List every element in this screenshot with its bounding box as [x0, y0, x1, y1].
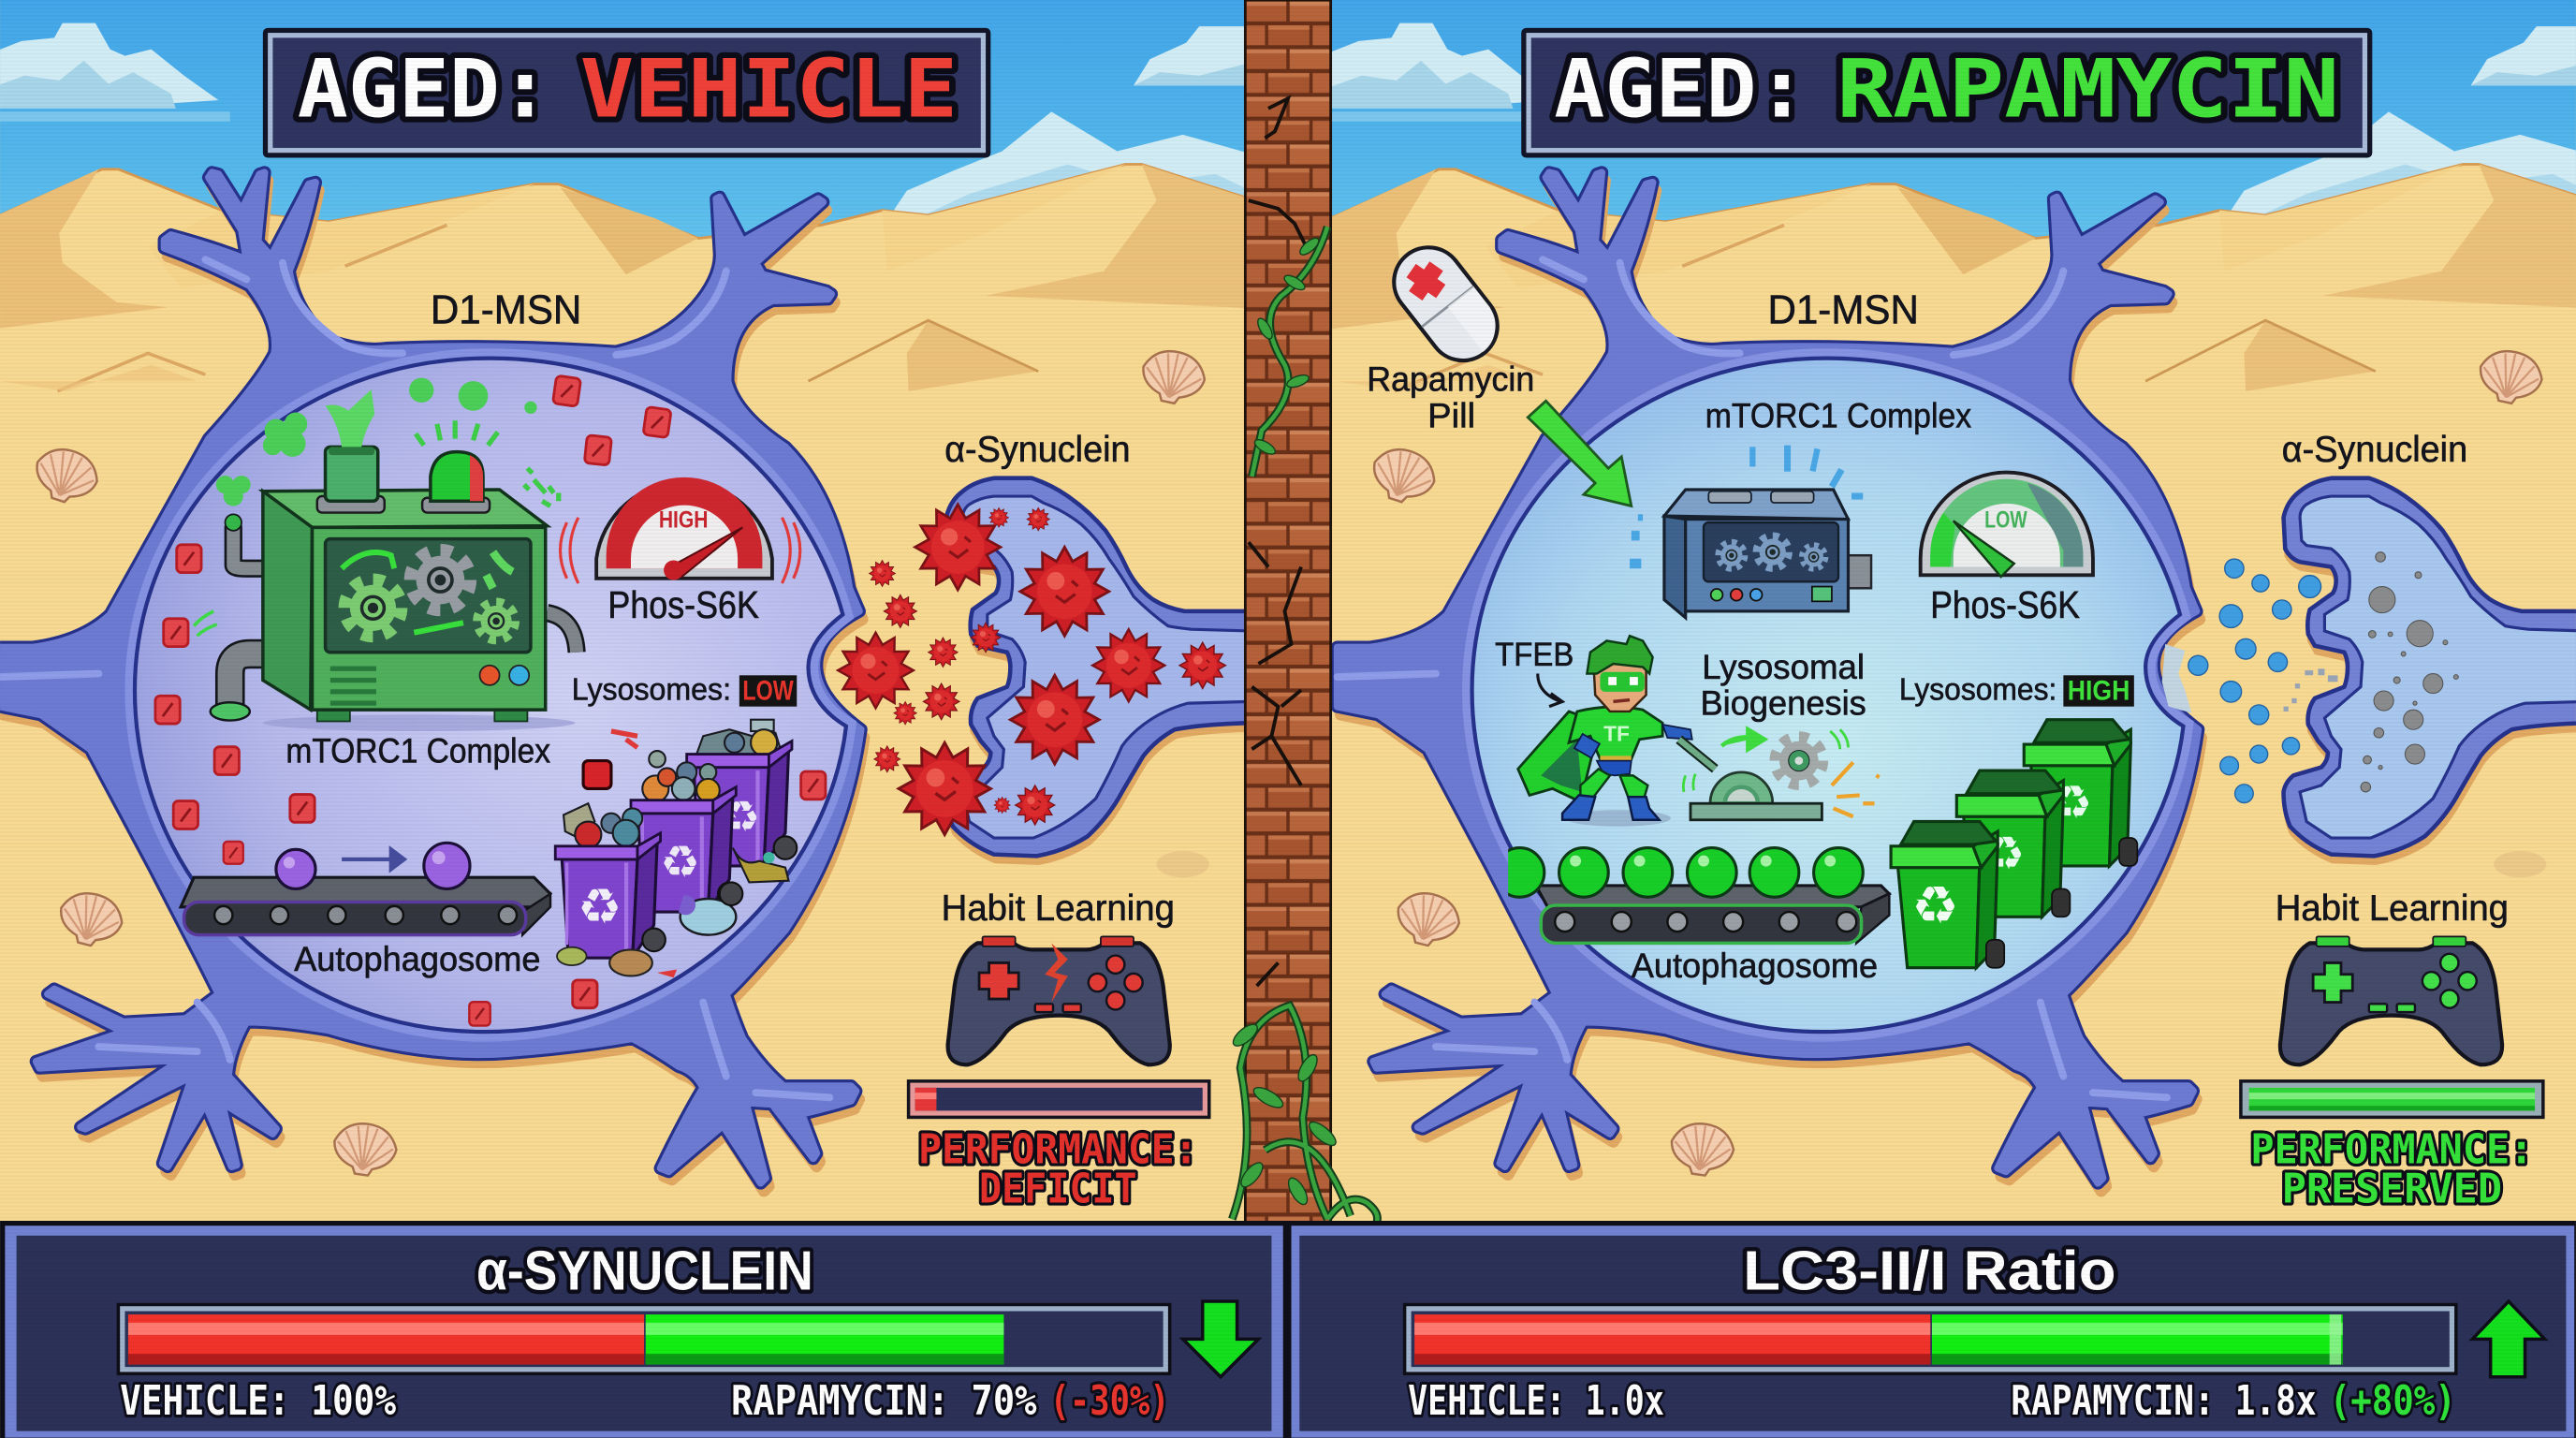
title banner: aged rapamycin: AGED: [1554, 43, 1808, 137]
bar labels: VEHICLE: 1.0x [1408, 1377, 1664, 1425]
desert scene with neuron [1321, 0, 2576, 1249]
icon: damaged gamepad [948, 936, 1170, 1064]
icon: overheating mTORC1 machine [211, 447, 577, 731]
icon: dissolving synapse speckle [2162, 644, 2337, 713]
label: rapamycin pill [1367, 360, 1534, 434]
arrow: increase [2472, 1301, 2545, 1377]
arrow: decrease [1183, 1301, 1258, 1377]
stacked bar [1403, 1303, 2458, 1375]
bar labels: (+80%) [2330, 1377, 2456, 1425]
icon: clean green recycling bins [1891, 720, 2137, 968]
title banner: aged vehicle [263, 28, 990, 157]
icon: TFEB superhero: TF [1603, 722, 1630, 746]
bar labels [120, 1377, 1170, 1425]
icon: conveyor with autophagosomes [181, 843, 550, 935]
status: performance deficit: DEFICIT [979, 1166, 1137, 1213]
status: performance deficit: PERFORMANCE: [918, 1126, 1197, 1174]
title banner: aged rapamycin: RAPAMYCIN [1837, 43, 2339, 137]
icon: overflowing purple recycling bins: ♻ [578, 879, 622, 934]
icon: biogenesis gears [1683, 729, 1880, 820]
label: lysosomal biogenesis [1701, 648, 1866, 722]
bar labels: RAPAMYCIN: 70% [731, 1377, 1037, 1425]
icon: calm mTORC1 machine [1664, 490, 1871, 618]
label: lysosomes low: Lysosomes: [572, 673, 731, 708]
label: phos-S6K: Phos-S6K [1930, 583, 2080, 626]
bar labels: RAPAMYCIN: 1.8x [2011, 1377, 2317, 1425]
presynaptic terminal [2300, 496, 2576, 838]
title banner: aged rapamycin [1521, 28, 2372, 157]
label: habit learning: Habit Learning [2276, 888, 2509, 929]
bar labels [1408, 1377, 2456, 1425]
icon: clean green recycling bins: ♻ [1911, 875, 1959, 934]
icon: clean green recycling bins: ♻ [2051, 778, 2092, 829]
stat panel: LC3 ratio [1292, 1221, 2576, 1438]
icon: conveyor with autophagosomes [1495, 848, 1889, 943]
desert scene with neuron [0, 0, 1265, 1249]
label: mTORC1 complex: mTORC1 Complex [285, 731, 551, 770]
status: performance preserved [2250, 1126, 2533, 1213]
label: rapamycin pill: Rapamycin [1367, 360, 1534, 399]
progress bar: performance deficit [907, 1079, 1211, 1119]
label: lysosomes high: HIGH [2068, 676, 2130, 707]
label: lysosomal biogenesis: Biogenesis [1701, 683, 1866, 722]
icon: overflowing purple recycling bins: ♻ [660, 838, 700, 888]
label: phos-S6K: Phos-S6K [607, 583, 759, 626]
vine: upper wall [1251, 227, 1327, 477]
label: TFEB with pointer: TFEB [1495, 637, 1573, 673]
label: lysosomes high: Lysosomes: [1899, 673, 2056, 708]
soma cytoplasm [1472, 359, 2183, 1032]
soma cytoplasm [135, 359, 846, 1032]
stat title: α-SYNUCLEIN [476, 1240, 813, 1302]
icon: healthy gamepad [2280, 936, 2502, 1064]
presynaptic terminal [963, 496, 1249, 838]
icon: overflowing purple recycling bins [555, 720, 797, 977]
brick wall divider [1245, 0, 1331, 1223]
arrow: pill acting on mTORC1 [1528, 401, 1632, 506]
label: autophagosome: Autophagosome [294, 940, 540, 978]
label: mTORC1 complex: mTORC1 Complex [1705, 396, 1972, 434]
label: TFEB with pointer [1495, 637, 1573, 707]
label: lysosomal biogenesis: Lysosomal [1702, 648, 1865, 686]
progress bar: performance preserved [2239, 1079, 2545, 1119]
stat title: LC3-II/I Ratio [1743, 1240, 2116, 1302]
icon: red cross on pill [1401, 256, 1451, 306]
label: D1-MSN: D1-MSN [1767, 287, 1919, 333]
icon: green exhaust smoke [194, 378, 559, 636]
label: alpha-synuclein: α-Synuclein [944, 430, 1131, 470]
label: autophagosome: Autophagosome [1632, 946, 1878, 985]
icon: phos-S6K high gauge: HIGH [659, 507, 708, 533]
label: alpha-synuclein: α-Synuclein [2282, 430, 2467, 470]
title banner: aged vehicle: AGED: [298, 43, 550, 137]
panel: aged vehicle [0, 0, 1265, 1249]
bar labels: VEHICLE: 100% [120, 1377, 397, 1425]
vine: lower wall [1230, 1005, 1377, 1223]
bar labels: (-30%) [1050, 1377, 1170, 1425]
status: performance preserved: PERFORMANCE: [2250, 1126, 2533, 1174]
icon: released alpha-synuclein droplets [2188, 559, 2321, 803]
icon: blue activity sparks [1630, 446, 1863, 568]
label: D1-MSN: D1-MSN [431, 287, 581, 333]
icon: phos-S6K low gauge: LOW [1984, 507, 2027, 533]
icon: aggregating alpha-synuclein particles [838, 505, 1225, 835]
panel: aged rapamycin [1321, 0, 2576, 1249]
label: lysosomes low: LOW [742, 676, 794, 707]
icon: TFEB superhero [1518, 636, 1715, 827]
icon: phos-S6K high gauge [561, 477, 800, 583]
status: performance deficit [918, 1129, 1193, 1206]
icon: overflowing purple recycling bins: ♻ [722, 793, 760, 841]
icon: phos-S6K low gauge [1921, 473, 2093, 577]
stacked bar [117, 1303, 1171, 1375]
icon: rapamycin pill [1392, 245, 1500, 363]
cracks in wall [1249, 98, 1308, 986]
label: rapamycin pill: Pill [1427, 396, 1475, 434]
title banner: aged vehicle: VEHICLE [580, 43, 958, 137]
drifting protein tiles [155, 375, 826, 1026]
icon: residual grey debris [2361, 552, 2458, 792]
status: performance preserved: PRESERVED [2282, 1166, 2502, 1213]
icon: clean green recycling bins: ♻ [1983, 829, 2025, 879]
label: habit learning: Habit Learning [942, 888, 1175, 929]
stat panel: alpha-synuclein [0, 1221, 1292, 1438]
